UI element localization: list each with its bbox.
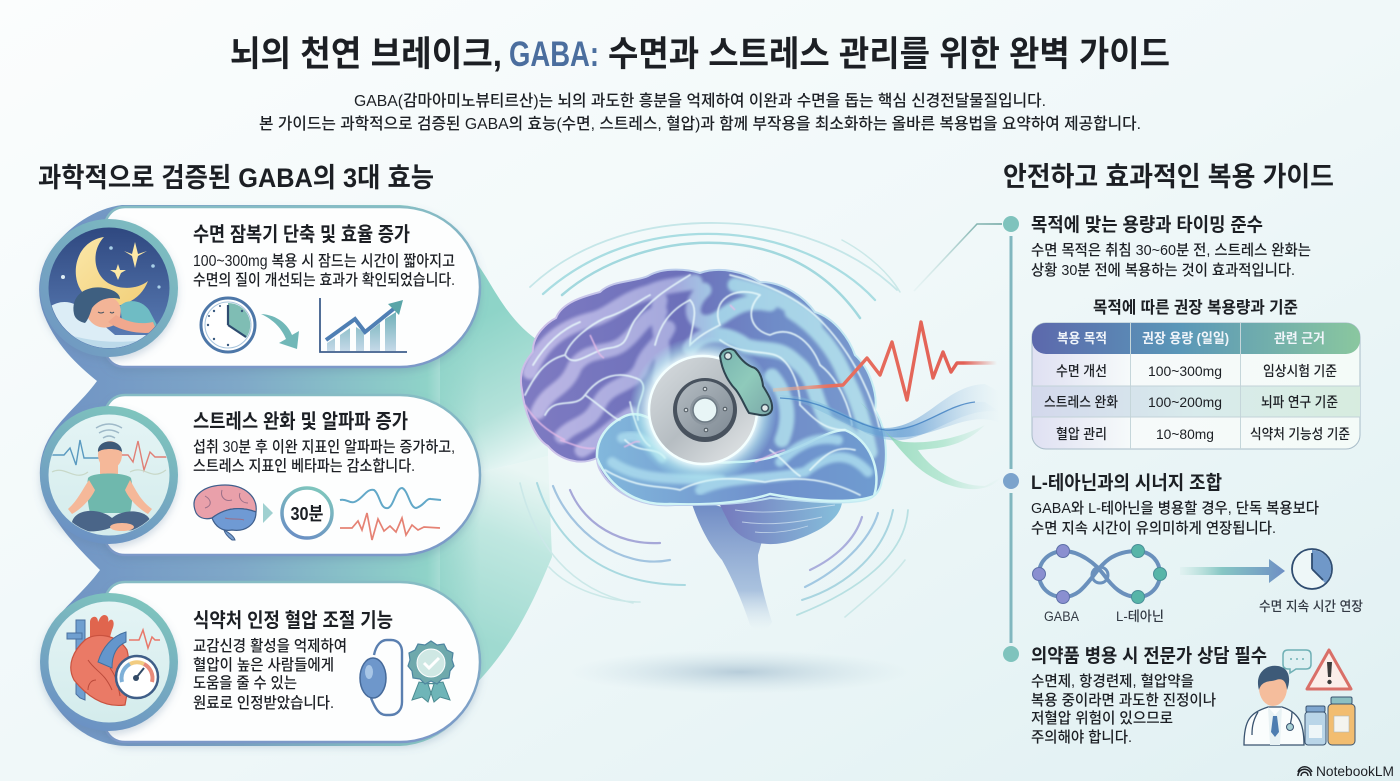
blood pressure body (193, 637, 347, 712)
speech bubble (1283, 650, 1311, 673)
sleep heading: 수면 잠복기 단축 및 효율 증가 (193, 223, 410, 246)
guide step 1: 상황 30분 전에 복용하는 것이 효과적입니다. (1031, 262, 1295, 279)
table rows: 100~200mg (1148, 394, 1222, 410)
table rows (1044, 363, 1350, 442)
icon: GABA and L-theanine molecules (1032, 544, 1166, 604)
panel: blood pressure benefit card (106, 582, 480, 742)
blood pressure body: 혈압이 높은 사람들에게 (193, 656, 334, 674)
panel: stress benefit card (106, 395, 480, 555)
icon: small brain (194, 485, 256, 540)
guide step 3: 의약품 병용 시 전문가 상담 필수 (1031, 645, 1267, 667)
guide step 1: 수면 목적은 취침 30~60분 전, 스트레스 완화는 (1031, 242, 1311, 259)
table rows: 100~300mg (1148, 363, 1222, 379)
temporal lobe (597, 414, 876, 504)
panel: sleep benefit card (106, 207, 480, 367)
icon: brake caliper (720, 349, 772, 415)
icon: meditating person circle (40, 406, 178, 544)
intro text: 본 가이드는 과학적으로 검증된 GABA의 효능(수면, 스트레스, 혈압)과 함께 부작용을 최소화하는 올바른 복용법을 요약하여 제공합니다. (259, 115, 1141, 133)
guide step 3: 주의해야 합니다. (1031, 729, 1132, 746)
title: 뇌의 천연 브레이크, (230, 35, 502, 74)
table header: 복용 목적 (1057, 331, 1107, 346)
right section heading: 안전하고 효과적인 복용 가이드 (1003, 162, 1334, 192)
guide step 3: 복용 중이라면 과도한 진정이나 (1031, 692, 1216, 709)
icon: down arrow (261, 314, 299, 349)
left section heading: 과학적으로 검증된 GABA의 3대 효능 (38, 163, 434, 193)
sleep body: 수면의 질이 개선되는 효과가 확인되었습니다. (193, 271, 455, 289)
icon: 30 minute timer (282, 488, 332, 538)
connector line to guide (914, 224, 1002, 291)
red stress wave (773, 322, 997, 400)
icon: brake disc (629, 336, 777, 484)
icon: doctor with medication and warning (1244, 650, 1355, 745)
warning triangle (1307, 650, 1351, 689)
icon: beta wave (340, 513, 440, 540)
brain stem (690, 498, 772, 630)
table rows: 식약처 기능성 기준 (1250, 426, 1350, 442)
icon: extended sleep clock (1292, 549, 1332, 589)
guide timeline (1003, 216, 1019, 662)
icon: sleeping person circle (40, 219, 178, 360)
molecule labels: GABA (1044, 609, 1079, 624)
blood pressure body: 원료로 인정받았습니다. (193, 694, 334, 712)
funnel connecting benefits to brain (440, 240, 552, 700)
NotebookLM logo: NotebookLM (1316, 763, 1394, 779)
guide step 3: 저혈압 위험이 있으므로 (1031, 710, 1173, 727)
sleep body: 100~300mg 복용 시 잠드는 시간이 짧아지고 (193, 252, 455, 270)
table heading: 목적에 따른 권장 복용량과 기준 (1093, 298, 1298, 317)
table header: 권장 용량 (일일) (1142, 331, 1229, 346)
guide step 2: L-테아닌과의 시너지 조합 (1031, 472, 1222, 494)
icon: blood pressure bulb (360, 640, 402, 715)
guide step 2: 수면 지속 시간이 유의미하게 연장됩니다. (1031, 520, 1276, 537)
brain illustration (521, 270, 886, 630)
table rows: 뇌파 연구 기준 (1261, 394, 1338, 410)
stress body: 스트레스 지표인 베타파는 감소합니다. (193, 457, 415, 475)
molecule labels: L-테아닌 (1116, 609, 1164, 624)
guide step 3: 수면제, 항경련제, 혈압약을 (1031, 673, 1194, 690)
extended sleep label: 수면 지속 시간 연장 (1259, 599, 1363, 614)
brain pink glints (525, 305, 785, 462)
icon: heart and gauge circle (40, 593, 178, 731)
guide step 1: 목적에 맞는 용량과 타이밍 준수 (1031, 214, 1263, 236)
cerebrum gyri bands (530, 282, 876, 504)
table header (1057, 331, 1325, 346)
stress body: 섭취 30분 후 이완 지표인 알파파는 증가하고, (193, 438, 455, 456)
table rows: 스트레스 완화 (1044, 394, 1118, 410)
medicine bottles (1305, 697, 1355, 745)
icon: alpha wave (340, 488, 441, 508)
icon: clock (201, 298, 255, 352)
blood pressure heading: 식약처 인정 혈압 조절 기능 (193, 609, 393, 632)
blood pressure body: 교감신경 활성을 억제하여 (193, 637, 347, 655)
title: 수면과 스트레스 관리를 위한 완벽 가이드 (608, 35, 1170, 74)
guide step 1 (1031, 214, 1311, 279)
stress body (193, 438, 455, 475)
table rows: 임상시험 기준 (1263, 363, 1337, 379)
table rows: 수면 개선 (1056, 363, 1107, 379)
icon: small arrow (263, 503, 273, 523)
blood pressure body: 도움을 줄 수 있는 (193, 674, 297, 692)
icon: 30 minute timer: 30분 (290, 504, 324, 524)
cerebellum (715, 495, 842, 544)
brain highlights (525, 275, 880, 495)
title: GABA: (509, 35, 599, 74)
icon: growth chart (320, 298, 407, 352)
blue and green signal ribbons (777, 384, 1000, 489)
molecule labels (1044, 609, 1164, 624)
title (230, 35, 1170, 74)
floor shadow (570, 650, 910, 694)
table rows: 10~80mg (1156, 426, 1214, 442)
icon: certification badge (408, 641, 454, 702)
panel: benefits connector backing shape (39, 205, 480, 746)
icon: concentric signal arcs (520, 223, 908, 617)
intro text (259, 92, 1141, 133)
sleep body (193, 252, 455, 289)
table rows: 혈압 관리 (1056, 426, 1107, 442)
stress heading: 스트레스 완화 및 알파파 증가 (193, 410, 408, 433)
guide step 2: GABA와 L-테아닌을 병용할 경우, 단독 복용보다 (1031, 500, 1319, 517)
table header: 관련 근거 (1274, 331, 1325, 346)
cerebrum base (521, 270, 886, 505)
dosage table (1032, 323, 1360, 449)
doctor (1244, 666, 1304, 745)
intro text: GABA(감마아미노뷰티르산)는 뇌의 과도한 흥분을 억제하여 이완과 수면을 돕는 핵심 신경전달물질입니다. (354, 92, 1046, 110)
guide step 2 (1031, 472, 1319, 537)
guide step 3 (1031, 645, 1267, 746)
arrow to extended sleep (1180, 559, 1285, 583)
